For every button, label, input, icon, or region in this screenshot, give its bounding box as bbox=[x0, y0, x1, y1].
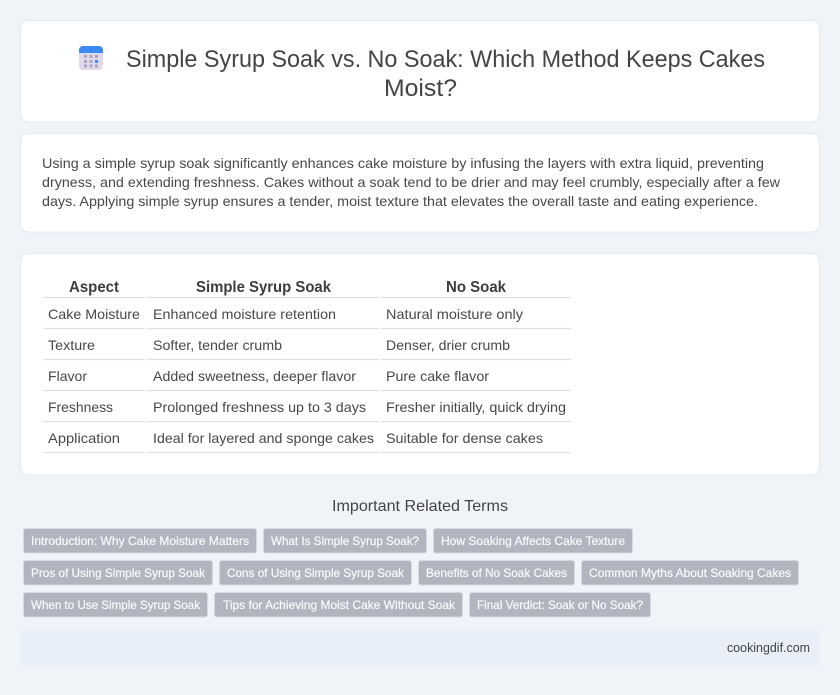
tag: When to Use Simple Syrup Soak bbox=[31, 598, 201, 612]
table header: Simple Syrup Soak bbox=[196, 279, 331, 296]
row: flavor: Pure cake flavor bbox=[386, 368, 489, 384]
row: cake moisture: Natural moisture only bbox=[386, 306, 523, 322]
row: freshness: Freshness bbox=[48, 399, 113, 415]
tag group: related terms bbox=[24, 528, 798, 617]
footer bbox=[20, 631, 820, 665]
tag: What Is Simple Syrup Soak? bbox=[271, 534, 419, 548]
row: texture: Softer, tender crumb bbox=[153, 337, 282, 353]
row: application: Application bbox=[48, 430, 120, 446]
row: flavor bbox=[48, 368, 489, 384]
row: application: Suitable for dense cakes bbox=[386, 430, 543, 446]
row: cake moisture bbox=[48, 306, 523, 322]
row: application bbox=[48, 430, 543, 446]
panel: introduction text: days. Applying simple syrup ensures a tender, moist texture that elevates the overall taste and eating experience. bbox=[42, 193, 758, 209]
table header: No Soak bbox=[446, 279, 506, 296]
tag: How Soaking Affects Cake Texture bbox=[441, 534, 625, 548]
row: texture bbox=[48, 337, 510, 353]
tag bbox=[24, 560, 212, 585]
tag bbox=[418, 560, 574, 585]
tag: Final Verdict: Soak or No Soak? bbox=[477, 598, 643, 612]
row: texture: Denser, drier crumb bbox=[386, 337, 510, 353]
row: cake moisture: Cake Moisture bbox=[48, 306, 140, 322]
footer: cookingdif.com bbox=[727, 641, 810, 655]
row: flavor: Added sweetness, deeper flavor bbox=[153, 368, 356, 384]
title bbox=[126, 46, 765, 102]
panel: introduction text: Using a simple syrup soak significantly enhances cake moisture by infusing the layers with extra liquid, preventing bbox=[42, 155, 764, 171]
row: application: Ideal for layered and sponge cakes bbox=[153, 430, 374, 446]
tag bbox=[434, 528, 632, 553]
tag bbox=[264, 528, 426, 553]
tag bbox=[470, 592, 650, 617]
panel: comparison table bbox=[20, 254, 820, 475]
icon: calendar bbox=[79, 46, 103, 70]
heading: important related terms: Important Related Terms bbox=[332, 498, 508, 515]
panel: title card bbox=[20, 20, 820, 122]
panel: introduction text bbox=[20, 134, 820, 232]
row: flavor: Flavor bbox=[48, 368, 87, 384]
tag: Cons of Using Simple Syrup Soak bbox=[227, 566, 405, 580]
tag: Pros of Using Simple Syrup Soak bbox=[31, 566, 206, 580]
tag bbox=[220, 560, 412, 585]
title: Moist? bbox=[384, 75, 457, 102]
tag: Benefits of No Soak Cakes bbox=[426, 566, 567, 580]
row: freshness bbox=[48, 399, 566, 415]
tag bbox=[214, 592, 462, 617]
tag: Introduction: Why Cake Moisture Matters bbox=[31, 534, 249, 548]
panel: introduction text: dryness, and extending freshness. Cakes without a soak tend to be drier and may feel crumbly, especially after a few bbox=[42, 174, 781, 190]
row: texture: Texture bbox=[48, 337, 95, 353]
row: freshness: Fresher initially, quick drying bbox=[386, 399, 566, 415]
title: Simple Syrup Soak vs. No Soak: Which Method Keeps Cakes bbox=[126, 46, 765, 73]
tag: Tips for Achieving Moist Cake Without Soak bbox=[223, 598, 456, 612]
tag bbox=[24, 528, 256, 553]
row: freshness: Prolonged freshness up to 3 days bbox=[153, 399, 366, 415]
table header bbox=[69, 279, 506, 296]
tag: Common Myths About Soaking Cakes bbox=[589, 566, 791, 580]
row: cake moisture: Enhanced moisture retention bbox=[153, 306, 336, 322]
table header: Aspect bbox=[69, 279, 120, 296]
tag bbox=[24, 592, 208, 617]
tag bbox=[582, 560, 798, 585]
